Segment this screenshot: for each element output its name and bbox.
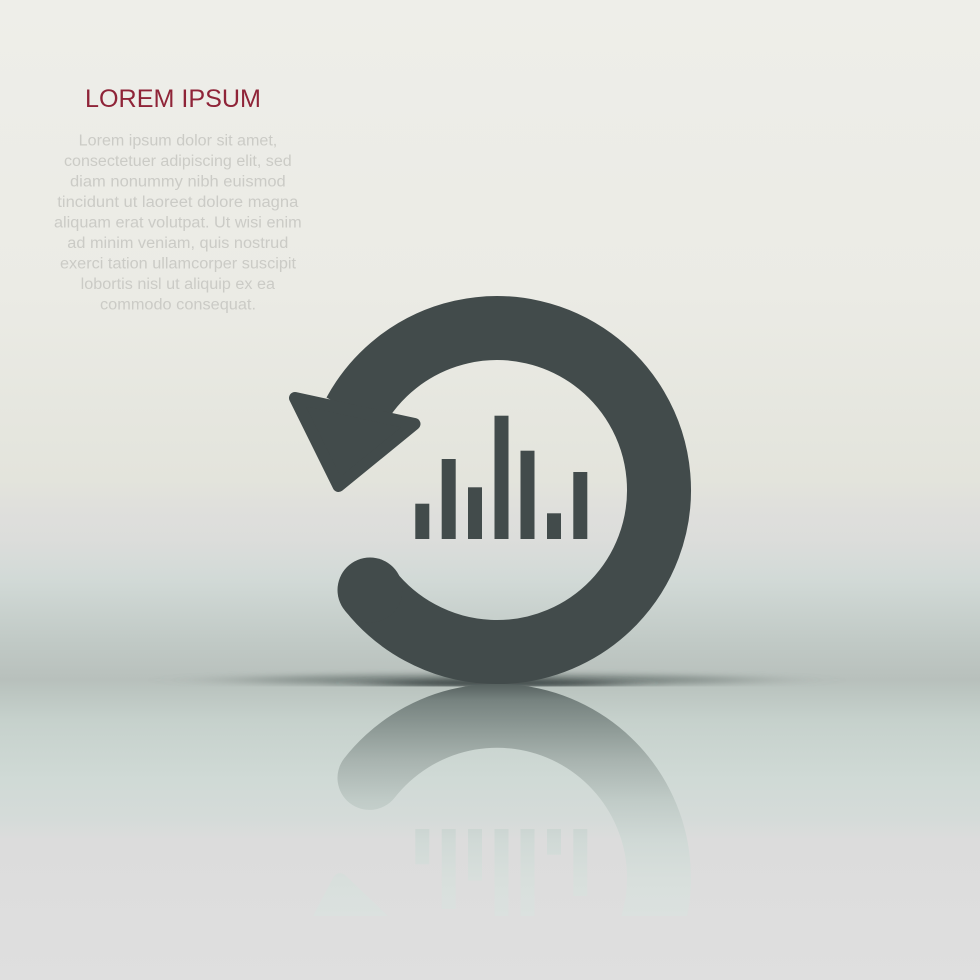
floor shadow xyxy=(247,674,747,687)
circular arrow ring xyxy=(355,328,659,652)
body text block: commodo consequat. xyxy=(100,296,256,314)
icon: circular arrow with bar chart xyxy=(295,328,659,652)
title: LOREM IPSUM xyxy=(85,85,261,113)
reflected arrowhead tip xyxy=(313,873,388,916)
arrowhead xyxy=(295,398,414,486)
body text block xyxy=(54,132,302,314)
mirrored reflection of icon xyxy=(313,684,691,916)
body text block: exerci tation ullamcorper suscipit xyxy=(60,256,297,272)
reflected bars xyxy=(415,829,587,916)
body text block: Lorem ipsum dolor sit amet, xyxy=(79,132,277,150)
bar chart xyxy=(415,416,587,539)
body text block: lobortis nisl ut aliquip ex ea xyxy=(81,276,275,293)
ring rounded tail xyxy=(338,558,402,622)
body text block: diam nonummy nibh euismod xyxy=(70,174,286,190)
body text block: ad minim veniam, quis nostrud xyxy=(67,235,288,252)
body text block: consectetuer adipiscing elit, sed xyxy=(64,153,292,170)
body text block: aliquam erat volutpat. Ut wisi enim xyxy=(54,214,302,232)
reflected ring xyxy=(337,684,691,916)
body text block: tincidunt ut laoreet dolore magna xyxy=(57,194,299,211)
